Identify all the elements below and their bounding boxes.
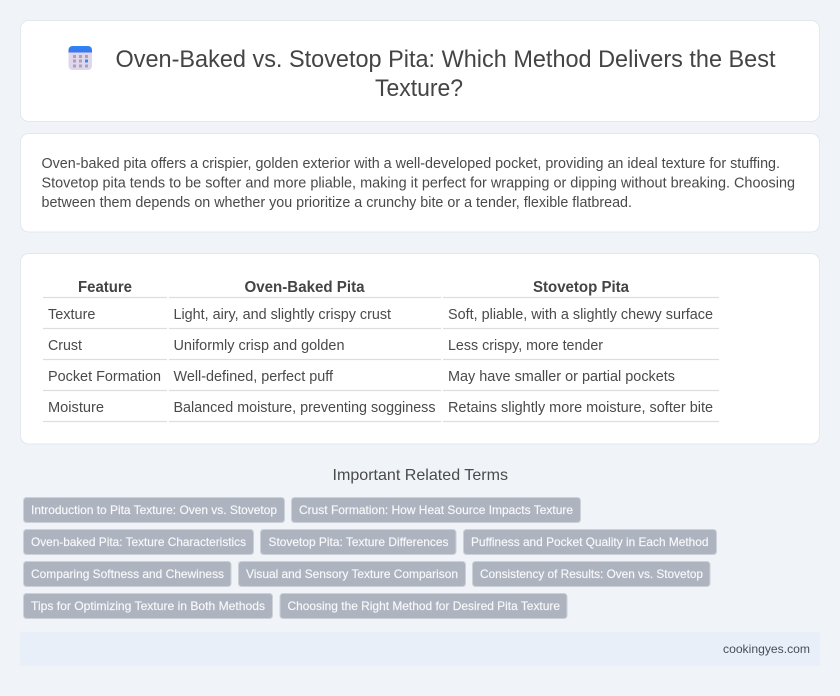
summary text: between them depends on whether you prioritize a crunchy bite or a tender, flexible flatbread. bbox=[42, 195, 632, 211]
tag bbox=[260, 530, 456, 554]
tag bbox=[24, 530, 254, 554]
tag: Oven-baked Pita: Texture Characteristics bbox=[31, 535, 246, 549]
row: crust: Crust bbox=[48, 338, 82, 354]
tag bbox=[238, 562, 466, 586]
row: moisture: Balanced moisture, preventing sogginess bbox=[174, 400, 436, 416]
tag: Choosing the Right Method for Desired Pita Texture bbox=[288, 599, 560, 613]
summary text bbox=[42, 156, 795, 211]
row: moisture: Retains slightly more moisture, softer bite bbox=[448, 400, 713, 416]
row: crust bbox=[48, 338, 603, 354]
row: texture bbox=[48, 307, 713, 323]
row: pocket formation: Well-defined, perfect puff bbox=[174, 369, 334, 385]
heading: important related terms: Important Related Terms bbox=[332, 467, 508, 484]
table header row: Oven-Baked Pita bbox=[244, 279, 365, 296]
row: pocket formation: May have smaller or partial pockets bbox=[448, 369, 675, 385]
row: texture: Texture bbox=[48, 307, 96, 323]
tag bbox=[464, 530, 716, 554]
tag bbox=[24, 498, 284, 522]
row: pocket formation: Pocket Formation bbox=[48, 369, 161, 385]
tag: Consistency of Results: Oven vs. Stovetop bbox=[480, 567, 703, 581]
tag: Introduction to Pita Texture: Oven vs. Stovetop bbox=[31, 503, 277, 517]
table header row: Feature bbox=[78, 279, 132, 296]
row: texture: Soft, pliable, with a slightly chewy surface bbox=[448, 307, 713, 323]
row: texture: Light, airy, and slightly crispy crust bbox=[174, 307, 391, 323]
comparison table bbox=[43, 279, 719, 422]
panel: summary card bbox=[20, 134, 820, 232]
table header row: Stovetop Pita bbox=[533, 279, 629, 296]
icon: calendar bbox=[68, 46, 92, 70]
related terms tags bbox=[24, 498, 716, 618]
tag bbox=[24, 562, 231, 586]
heading: Oven-Baked vs. Stovetop Pita: Which Method Delivers the Best bbox=[116, 46, 776, 73]
heading: Texture? bbox=[375, 75, 463, 102]
summary text: Oven-baked pita offers a crispier, golden exterior with a well-developed pocket, providing an ideal texture for stuffing. bbox=[42, 156, 780, 172]
tag bbox=[472, 562, 710, 586]
footer bar bbox=[20, 632, 820, 666]
tag: Puffiness and Pocket Quality in Each Method bbox=[471, 535, 708, 549]
footer source: cookingyes.com bbox=[723, 642, 810, 656]
heading bbox=[116, 46, 776, 102]
tag: Crust Formation: How Heat Source Impacts Texture bbox=[299, 503, 573, 517]
tag: Visual and Sensory Texture Comparison bbox=[246, 567, 458, 581]
table header row bbox=[78, 279, 629, 296]
row: crust: Uniformly crisp and golden bbox=[174, 338, 344, 354]
tag bbox=[292, 498, 580, 522]
tag: Stovetop Pita: Texture Differences bbox=[268, 535, 448, 549]
tag: Comparing Softness and Chewiness bbox=[31, 567, 224, 581]
row: moisture bbox=[48, 400, 713, 416]
panel: comparison table card bbox=[20, 254, 820, 444]
summary text: Stovetop pita tends to be softer and more pliable, making it perfect for wrapping or dipping without breaking. Choosing bbox=[42, 176, 795, 192]
tag bbox=[24, 594, 272, 618]
panel: title card bbox=[20, 20, 820, 122]
row: pocket formation bbox=[48, 369, 675, 385]
tag: Tips for Optimizing Texture in Both Methods bbox=[31, 599, 265, 613]
tag bbox=[280, 594, 567, 618]
row: crust: Less crispy, more tender bbox=[448, 338, 603, 354]
row: moisture: Moisture bbox=[48, 400, 104, 416]
